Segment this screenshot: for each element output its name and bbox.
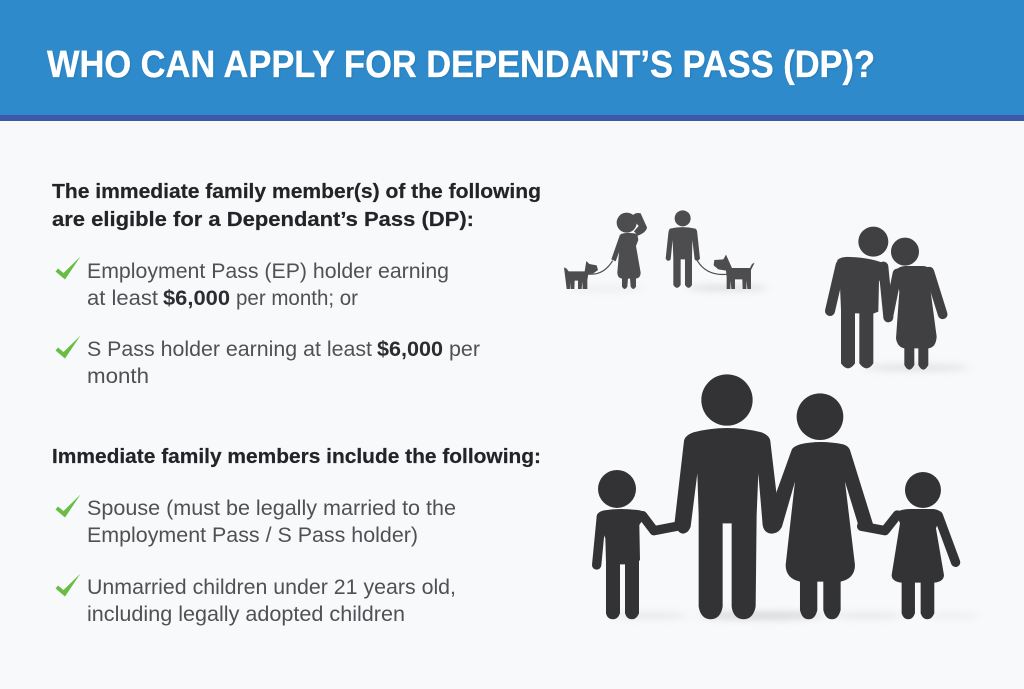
list item: S Pass — [56, 336, 480, 388]
list item: Employment Pass: per month; or — [236, 287, 358, 310]
son — [598, 470, 636, 508]
icon: couple holding hands — [830, 227, 970, 370]
man — [675, 210, 691, 226]
list item: spouse: Spouse (must be legally married to the — [87, 497, 456, 520]
list item: Employment Pass — [56, 256, 449, 310]
woman — [617, 213, 637, 233]
daughter — [905, 472, 941, 508]
man — [858, 227, 888, 257]
list item: children: Unmarried children under 21 years old, — [87, 576, 456, 599]
father — [701, 374, 753, 426]
list item: children: including legally adopted children — [87, 603, 405, 626]
list item: spouse: Employment Pass / S Pass holder) — [87, 524, 418, 547]
title: WHO CAN APPLY FOR DEPENDANT’S PASS (DP)? — [47, 44, 875, 86]
list item: children — [56, 574, 456, 626]
list item: S Pass: S Pass holder earning at least — [87, 338, 372, 361]
list item: spouse — [56, 494, 456, 547]
icon: couple walking dogs — [564, 210, 768, 291]
list item: S Pass: $6,000 — [377, 338, 443, 361]
heading: immediate family members: Immediate family members include the following: — [52, 446, 541, 468]
list item: S Pass: per — [449, 338, 480, 361]
icon: family of four — [597, 374, 978, 619]
heading: eligibility: The immediate family member(s) of the following — [52, 181, 541, 203]
list item: Employment Pass: $6,000 — [163, 287, 230, 310]
header banner — [0, 0, 1024, 121]
list item: Employment Pass: Employment Pass (EP) holder earning — [87, 260, 449, 283]
right dog — [714, 255, 755, 289]
list item: Employment Pass: at least — [87, 287, 158, 310]
left dog — [564, 261, 598, 289]
mother — [797, 393, 843, 440]
list item: S Pass: month — [87, 365, 149, 388]
heading: eligibility — [52, 181, 541, 231]
heading: eligibility: are eligible for a Dependant’s Pass (DP): — [52, 209, 474, 231]
woman — [891, 237, 919, 266]
